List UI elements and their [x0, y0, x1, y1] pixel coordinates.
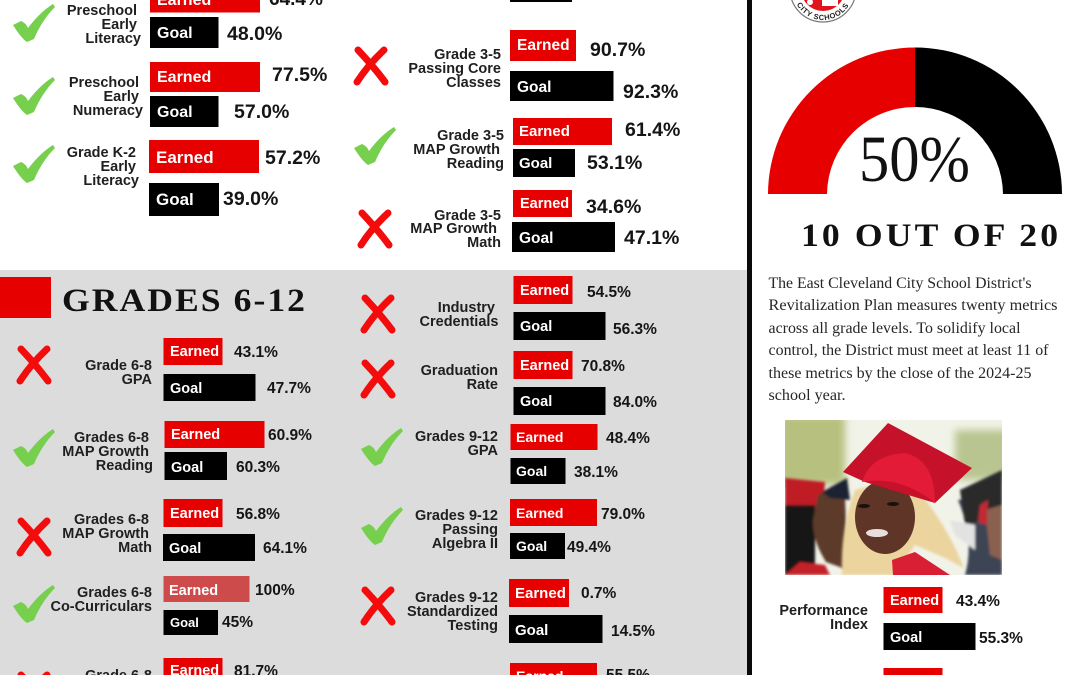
metric: earned bar cut off at bottom — [510, 663, 650, 675]
metric label: MAP Growth — [410, 221, 497, 237]
icon: cross — [364, 298, 392, 330]
heading: 10 out of 20: 10 OUT OF 20 — [801, 217, 1058, 254]
metric: Grades 9-12 Passing Algebra II: 79.0% — [601, 506, 645, 523]
metric: Grades 6-8 MAP Growth Math: Goal — [169, 541, 201, 557]
photo: graduate in red cap — [780, 415, 1010, 575]
logo: city schools seal: CITY SCHOOLS — [798, 2, 848, 20]
heading: grades 6-12 — [0, 277, 305, 319]
metric: Graduation Rate: 70.8% — [581, 358, 625, 375]
metric: Grade 3-5 MAP Growth Reading: Earned — [519, 123, 570, 140]
metric: Grade 3-5 Passing Core Classes: Goal — [517, 79, 551, 96]
icon: check — [354, 127, 396, 165]
metric label: Preschool — [69, 75, 139, 91]
metric label: Grades 6-8 — [74, 430, 149, 446]
metric label: Grades 6-8 — [77, 585, 152, 601]
metric: Grade 3-5 MAP Growth Math: 34.6% — [586, 196, 641, 218]
metric: Grade 6-8 (cut off at bottom) — [20, 658, 278, 675]
metric: Preschool Early Numeracy: 57.0% — [234, 101, 289, 123]
metric: Grades 9-12 Passing Algebra II: Earned — [516, 505, 563, 521]
metric label: MAP Growth — [62, 444, 149, 460]
metric label: Standardized — [407, 604, 498, 620]
panel: grades 6-12 background — [0, 270, 747, 675]
metric label: Industry — [438, 300, 495, 316]
metric: Grade 3-5 MAP Growth Math: Goal — [519, 230, 553, 247]
metric: Grades 6-8 Co-Curriculars: 45% — [222, 614, 253, 631]
metric label: Grade K-2 — [67, 145, 136, 161]
metric: Grades 9-12 Passing Algebra II — [361, 499, 645, 559]
metric label: Co-Curriculars — [50, 599, 152, 615]
goal bar cut off at top — [510, 0, 572, 2]
metric: Grades 9-12 Standardized Testing: Goal — [515, 622, 548, 639]
metric: Graduation Rate — [364, 351, 657, 415]
metric: Grade K-2 Early Literacy: 57.2% — [265, 147, 320, 169]
metric label: Rate — [467, 377, 498, 393]
metric label: Testing — [448, 618, 498, 634]
metric: Grade 6-8 GPA: 47.7% — [267, 380, 311, 397]
text block: revitalization plan: across all grade levels. To solidify local — [768, 320, 1021, 337]
metric label: Grade 3-5 — [434, 47, 501, 63]
metric label: Grades 9-12 — [415, 590, 498, 606]
icon: cross — [20, 521, 48, 553]
metric: Performance Index: Earned — [890, 593, 939, 609]
metric: Grade 3-5 MAP Growth Reading: 53.1% — [587, 152, 642, 174]
icon: cross — [357, 50, 385, 82]
metric: Grades 9-12 GPA — [361, 424, 650, 484]
metric: Graduation Rate: Earned — [520, 358, 569, 374]
metric label: Grade 3-5 — [437, 128, 504, 144]
column divider — [747, 0, 752, 675]
metric label: Early — [101, 159, 136, 175]
icon: cross — [364, 363, 392, 395]
metric: Performance Index: 43.4% — [956, 593, 1000, 610]
text block: revitalization plan: school year. — [768, 387, 846, 404]
metric: Grades 6-8 MAP Growth Math: 64.1% — [263, 540, 307, 557]
metric: Preschool Early Literacy: 48.0% — [227, 23, 282, 45]
metric: Grade 3-5 Passing Core Classes: Earned — [517, 37, 570, 54]
metric label: Math — [467, 235, 501, 251]
heading: grades 6-12: GRADES 6-12 — [62, 282, 305, 319]
metric: Grade 6-8 GPA — [20, 338, 311, 401]
chart: semicircle gauge — [768, 47, 1062, 196]
metric: Grade 3-5 MAP Growth Math: Earned — [520, 196, 569, 212]
text block: revitalization plan: Revitalization Plan measures twenty metrics — [768, 297, 1058, 314]
red square marker — [0, 277, 51, 318]
metric: Industry Credentials: 56.3% — [613, 321, 657, 338]
metric: Grade K-2 Early Literacy — [13, 140, 320, 216]
hair — [842, 480, 964, 575]
metric: Graduation Rate: Goal — [520, 394, 552, 410]
metric: Preschool Early Literacy — [13, 0, 323, 48]
metric label: Grades 9-12 — [415, 429, 498, 445]
metric: Grades 6-8 Co-Curriculars — [13, 576, 295, 635]
metric label: MAP Growth — [413, 142, 500, 158]
metric: Performance Index — [779, 587, 1023, 650]
metric label: Grade 6-8 — [85, 358, 152, 374]
metric label: Index — [830, 617, 868, 633]
earned bar cut off at bottom right — [884, 668, 942, 675]
metric: Industry Credentials: Earned — [520, 283, 569, 299]
metric: Grade 3-5 MAP Growth Math: 47.1% — [624, 227, 679, 249]
text block: revitalization plan: control, the District must meet at least 11 of — [768, 342, 1049, 359]
metric: Graduation Rate: 84.0% — [613, 394, 657, 411]
metric label: Graduation — [421, 363, 498, 379]
metric: Preschool Early Numeracy: 77.5% — [272, 64, 327, 86]
metric: Grade 3-5 Passing Core Classes: 90.7% — [590, 39, 645, 61]
icon: check — [361, 428, 403, 466]
metric: Performance Index: Goal — [890, 630, 922, 646]
metric label: MAP Growth — [62, 526, 149, 542]
metric label: Algebra II — [432, 536, 498, 552]
metric: Grades 9-12 Standardized Testing — [364, 579, 655, 643]
metric label: Math — [118, 540, 152, 556]
metric label: Grade 3-5 — [434, 208, 501, 224]
metric: Grade 3-5 MAP Growth Reading — [354, 118, 680, 177]
gauge value: 50% — [859, 123, 970, 196]
metric: Grades 6-8 MAP Growth Reading: 60.9% — [268, 427, 312, 444]
metric: Grade 3-5 Passing Core Classes — [357, 30, 678, 103]
metric: Performance Index: 55.3% — [979, 630, 1023, 647]
metric label: Passing — [442, 522, 498, 538]
cap — [843, 423, 972, 503]
metric label: Reading — [96, 458, 153, 474]
text block: revitalization plan: The East Cleveland City School District's — [768, 275, 1032, 292]
metric: Grades 6-8 Co-Curriculars: 100% — [255, 582, 295, 599]
metric: Industry Credentials: Goal — [520, 319, 552, 335]
metric: Grades 9-12 Standardized Testing: 14.5% — [611, 623, 655, 640]
metric label: Preschool — [67, 3, 137, 19]
metric: Grade 3-5 MAP Growth Reading: 61.4% — [625, 119, 680, 141]
icon: check — [361, 507, 403, 545]
gauge red half — [768, 47, 915, 194]
metric: Industry Credentials — [364, 276, 657, 340]
metric label: GPA — [122, 372, 153, 388]
icon: check — [13, 4, 55, 42]
metric: Grade K-2 Early Literacy: Goal — [156, 190, 194, 209]
text block: revitalization plan: these metrics by the close of the 2024-25 — [768, 365, 1032, 382]
metric: Grades 9-12 Standardized Testing: 0.7% — [581, 585, 617, 602]
metric label: Classes — [446, 75, 501, 91]
metric: Preschool Early Numeracy — [13, 62, 327, 127]
metric: Grade 6-8 GPA: Goal — [170, 381, 202, 397]
metric: Grades 6-8 MAP Growth Reading: 60.3% — [236, 459, 280, 476]
icon: check — [13, 585, 55, 623]
metric: Preschool Early Numeracy: Goal — [157, 104, 193, 121]
metric label: GPA — [468, 443, 499, 459]
metric label: Literacy — [83, 173, 139, 189]
metric: Grades 9-12 GPA: 38.1% — [574, 464, 618, 481]
metric: Grades 6-8 MAP Growth Math — [20, 499, 307, 561]
metric label: Grades 9-12 — [415, 508, 498, 524]
gauge black half — [915, 48, 1062, 194]
metric: Grade 3-5 MAP Growth Math — [361, 190, 679, 252]
metric: Preschool Early Literacy: Goal — [157, 25, 193, 42]
metric: Grades 6-8 MAP Growth Reading: Earned — [171, 427, 220, 443]
metric label: Performance — [779, 603, 868, 619]
metric: Grades 9-12 Standardized Testing: Earned — [515, 585, 566, 602]
metric label: Grades 6-8 — [74, 512, 149, 528]
icon: cross — [361, 213, 389, 245]
metric: Grades 6-8 MAP Growth Reading — [13, 421, 312, 480]
icon: cross — [20, 349, 48, 381]
metric: Grade K-2 Early Literacy: 39.0% — [223, 188, 278, 210]
metric: Grades 6-8 MAP Growth Reading: Goal — [171, 460, 203, 476]
icon: check — [13, 145, 55, 183]
metric label: Literacy — [85, 31, 141, 47]
metric: Grades 9-12 GPA: Goal — [516, 463, 547, 479]
metric: Grade K-2 Early Literacy: Earned — [156, 148, 214, 167]
metric: Industry Credentials: 54.5% — [587, 284, 631, 301]
metric: Preschool Early Numeracy: Earned — [157, 69, 211, 86]
metric label: Numeracy — [73, 103, 143, 119]
metric: Grades 9-12 GPA: Earned — [516, 429, 563, 445]
smile — [866, 529, 888, 537]
metric: Grades 6-8 Co-Curriculars: Goal — [170, 615, 199, 630]
metric: Grade 6-8 GPA: 43.1% — [234, 344, 278, 361]
metric: Grades 9-12 Passing Algebra II: Goal — [516, 538, 547, 554]
metric: Grades 6-8 Co-Curriculars: Earned — [169, 583, 218, 599]
face — [855, 480, 915, 554]
metric label: Reading — [447, 156, 504, 172]
metric: Grade 6-8 GPA: Earned — [170, 344, 219, 360]
metric: Grades 6-8 MAP Growth Math: Earned — [170, 506, 219, 522]
metric: Grade 3-5 Passing Core Classes: 92.3% — [623, 81, 678, 103]
icon: check — [13, 429, 55, 467]
icon: check — [13, 77, 55, 115]
metric label: Early — [104, 89, 139, 105]
metric: Grade 3-5 MAP Growth Reading: Goal — [519, 155, 552, 172]
metric: Grades 6-8 MAP Growth Math: 56.8% — [236, 506, 280, 523]
metric: Grades 9-12 GPA: 48.4% — [606, 430, 650, 447]
metric label: Early — [102, 17, 137, 33]
metric: Grades 9-12 Passing Algebra II: 49.4% — [567, 539, 611, 556]
icon: cross — [364, 590, 392, 622]
metric label: Passing Core — [408, 61, 501, 77]
metric label: Credentials — [420, 314, 498, 330]
